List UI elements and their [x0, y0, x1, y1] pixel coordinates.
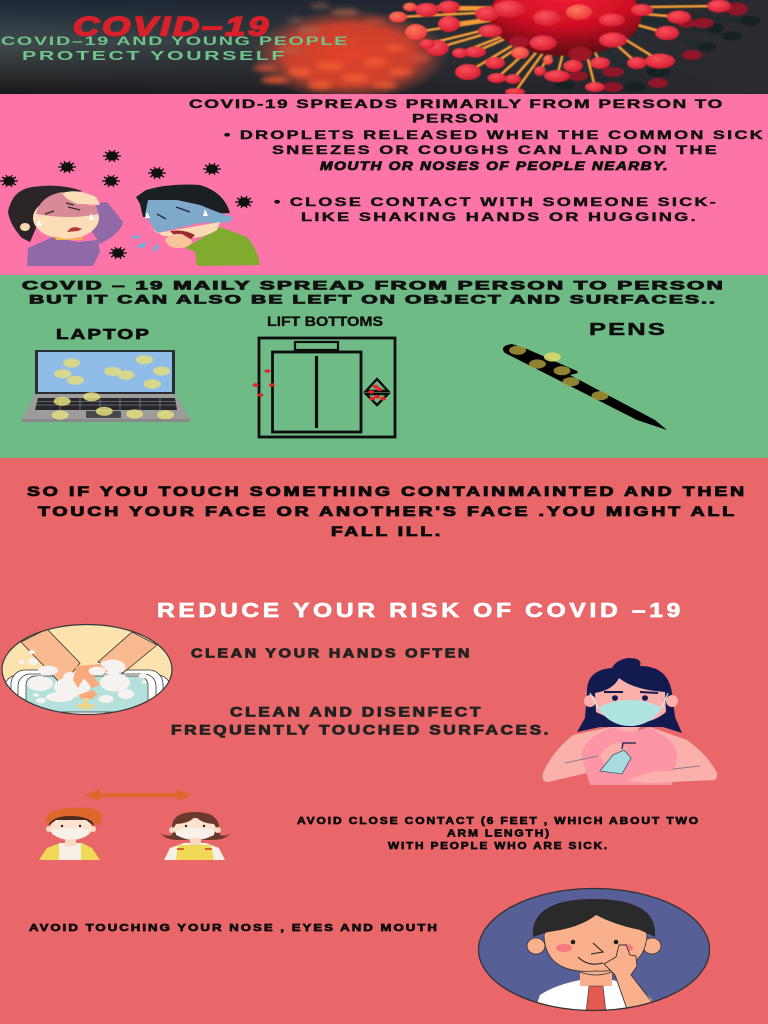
heading: spreads primarily: PERSON [412, 114, 500, 126]
panel: risk and prevention [1, 486, 744, 1012]
subtitle line one: COVID–19 AND YOUNG PEOPLE [1, 36, 349, 48]
heading: spreads primarily: COVID-19 SPREADS PRIMARILY FROM PERSON TO [189, 99, 724, 111]
text block: touching contaminated things: TOUCH YOUR FACE OR ANOTHER'S FACE .YOU MIGHT ALL [38, 504, 737, 519]
image: red coronavirus close-up [389, 0, 760, 96]
text: clean your hands: CLEAN YOUR HANDS OFTEN [191, 646, 472, 660]
illustration: boy with mask [39, 808, 102, 860]
icon: lift doors and buttons [253, 338, 395, 437]
text block: avoid close contact [297, 815, 700, 852]
text block: touching contaminated things: FALL ILL. [331, 524, 443, 539]
heading: reduce your risk: REDUCE YOUR RISK OF COVID –19 [157, 600, 684, 622]
icon: laptop with germ spots [22, 350, 190, 422]
text block: droplets: MOUTH OR NOSES OF PEOPLE NEARBY. [320, 159, 669, 173]
image: blurred virus in background [252, 4, 448, 101]
text: avoid touching face: AVOID TOUCHING YOUR NOSE , EYES AND MOUTH [29, 922, 439, 934]
subtitle line two: PROTECT YOURSELF [22, 49, 287, 63]
illustration: sick woman [8, 186, 123, 266]
illustration: coughing man [130, 185, 260, 266]
text block: avoid close contact: ARM LENGTH) [447, 828, 551, 840]
text block: clean and disinfect: CLEAN AND DISENFECT [230, 704, 483, 720]
illustration: woman with mask and spray [543, 658, 717, 785]
label: pens: PENS [589, 319, 667, 339]
text block: touching contaminated things: SO IF YOU TOUCH SOMETHING CONTAINMAINTED AND THEN [27, 484, 747, 499]
illustration: boy touching nose [478, 888, 710, 1012]
arrow: two metre distance [85, 789, 192, 801]
panel: header banner [0, 0, 768, 101]
icons: floating virus particles [0, 150, 253, 259]
label: laptop: LAPTOP [56, 326, 151, 343]
text block: droplets: SNEEZES OR COUGHS CAN LAND ON THE [272, 145, 719, 157]
text block: avoid close contact: AVOID CLOSE CONTACT (6 FEET , WHICH ABOUT TWO [297, 815, 700, 827]
text block: close contact [274, 197, 718, 224]
panel: how it spreads [0, 94, 768, 275]
text block: close contact: • CLOSE CONTACT WITH SOMEONE SICK- [274, 197, 718, 209]
text block: touching contaminated things [27, 484, 747, 539]
label: lift bottoms: LIFT BOTTOMS [267, 314, 383, 329]
panel: surfaces [0, 275, 768, 458]
text block: clean and disinfect [171, 704, 551, 738]
text block: droplets [224, 130, 765, 173]
heading: left on surfaces: BUT IT CAN ALSO BE LEFT ON OBJECT AND SURFACES.. [29, 292, 717, 306]
text block: clean and disinfect: FREQUENTLY TOUCHED SURFACES. [171, 722, 551, 738]
text block: droplets: • DROPLETS RELEASED WHEN THE COMMON SICK [224, 130, 765, 142]
heading: spreads primarily [189, 99, 724, 126]
heading: left on surfaces: COVID – 19 MAILY SPREAD FROM PERSON TO PERSON [22, 278, 725, 292]
illustration: girl with mask [160, 812, 230, 860]
illustration: washing hands [2, 624, 172, 725]
text block: close contact: LIKE SHAKING HANDS OR HUGGING. [301, 212, 698, 224]
title: COVID–19 [73, 12, 271, 42]
icon: pen with germ spots [503, 344, 667, 430]
text block: avoid close contact: WITH PEOPLE WHO ARE SICK. [388, 840, 609, 852]
heading: left on surfaces [22, 278, 725, 306]
